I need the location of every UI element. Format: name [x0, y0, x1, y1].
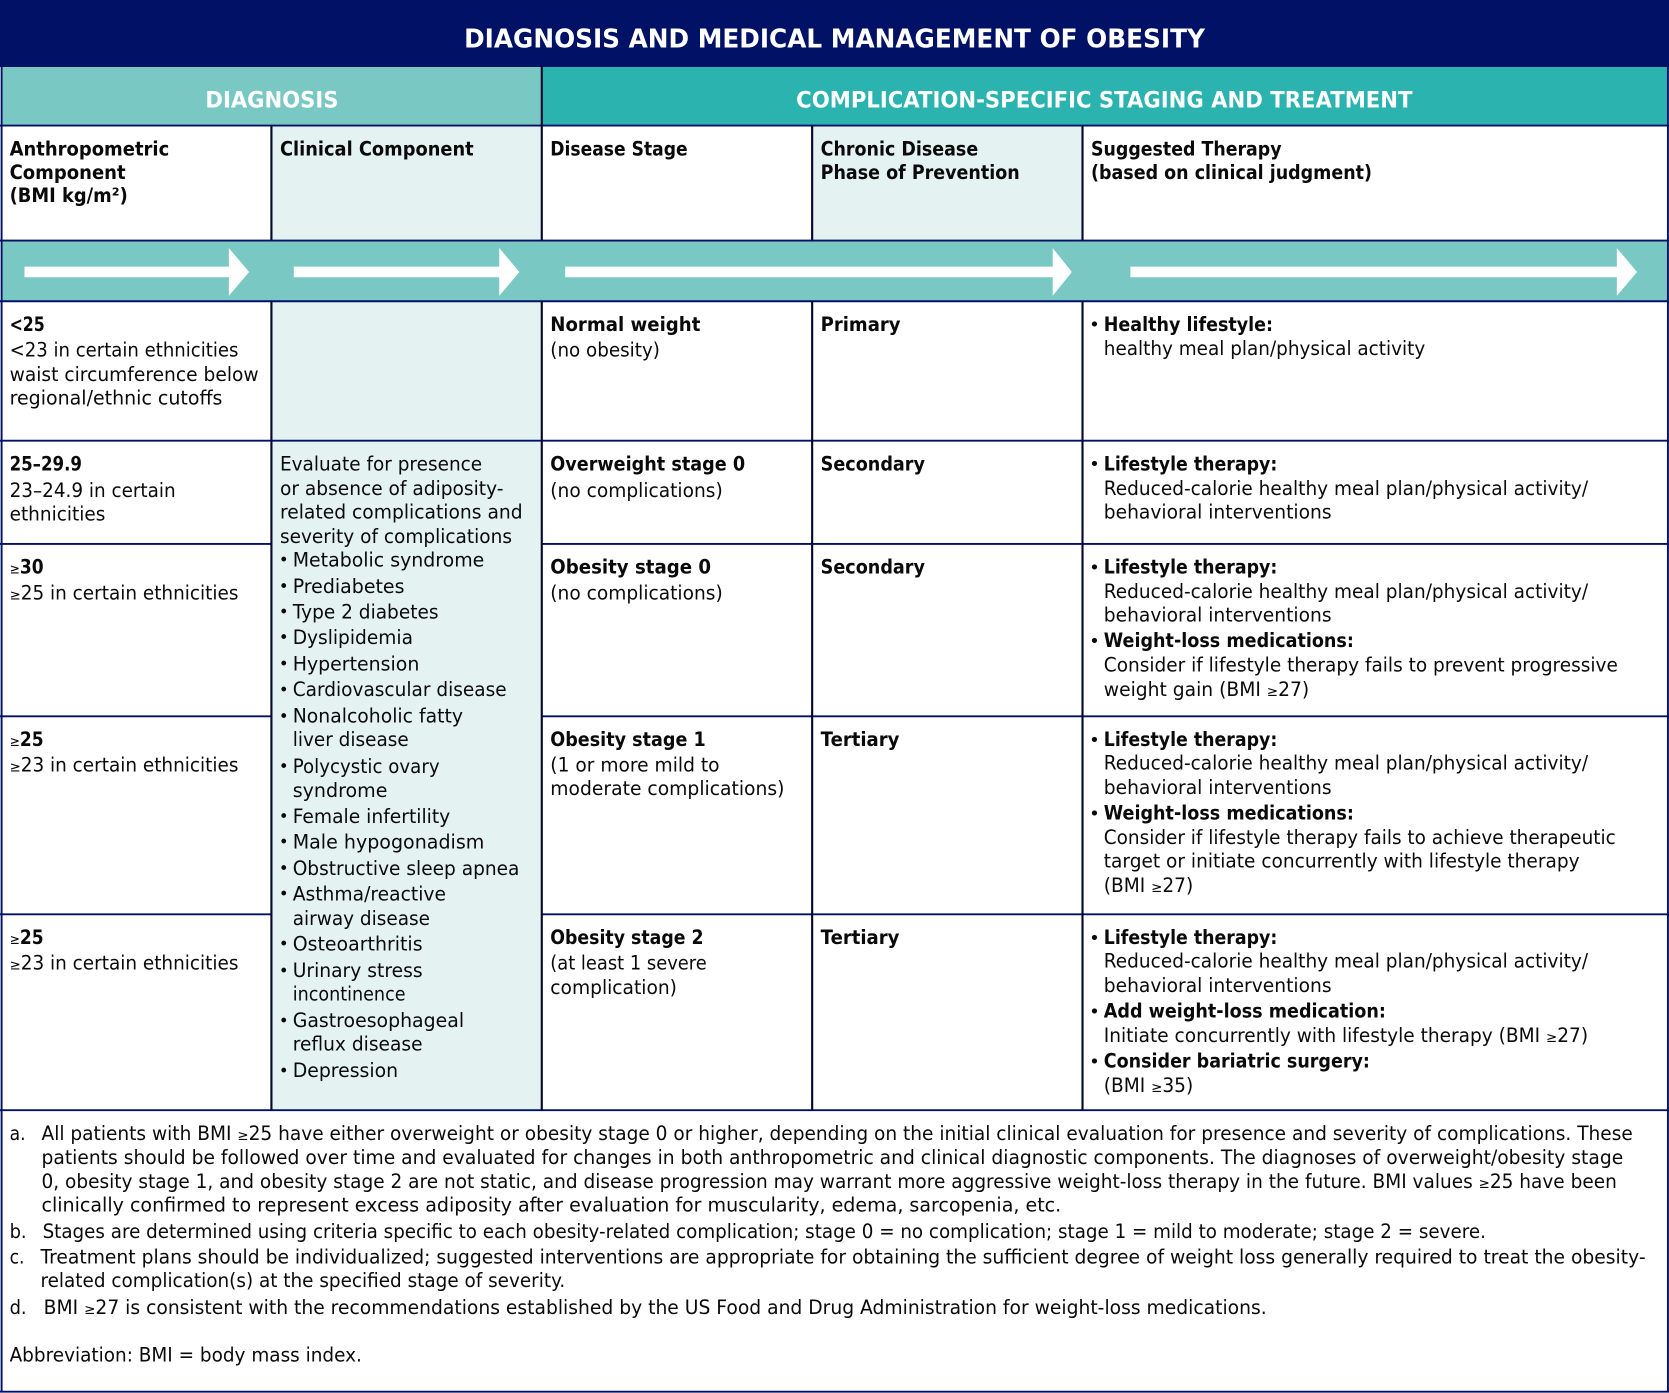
stage: overweight stage 0: (no complications) [550, 479, 723, 502]
therapy: obesity stage 1: target or initiate concurrently with lifestyle therapy [1104, 849, 1580, 872]
stage: obesity stage 0 [550, 556, 723, 604]
column header: chronic disease phase of prevention: Phase of Prevention [821, 161, 1020, 184]
complications list: • [279, 757, 289, 776]
evaluation intro text: related complications and [280, 500, 523, 523]
column shading: chronic disease phase [812, 126, 1083, 241]
complications list: • [279, 655, 289, 674]
complications list: • [279, 628, 289, 647]
complications list: Urinary stress [293, 959, 423, 982]
evaluation intro text [280, 452, 523, 548]
stage: obesity stage 1: Obesity stage 1 [550, 728, 706, 751]
footnote d: BMI ≥27 is consistent with the recommendations established by the US Food and Drug Administration for weight-loss medications. [44, 1296, 1267, 1319]
abbreviation note: Abbreviation: BMI = body mass index. [10, 1343, 362, 1366]
complications list: • [279, 680, 289, 699]
therapy: obesity stage 2: • [1089, 1001, 1100, 1022]
anthropometric: normal weight row: <23 in certain ethnicities [10, 339, 238, 362]
footnote a: patients should be followed over time and evaluated for changes in both anthropometric and clinical diagnostic components. The diagnoses of overweight/obesity stage [42, 1146, 1623, 1169]
section header: complication-specific staging and treatment [542, 66, 1668, 126]
complications list [279, 548, 519, 1082]
anthropometric: obesity stage 1 row: ≥25 [10, 728, 44, 751]
evaluation intro text: severity of complications [280, 525, 512, 548]
column header: chronic disease phase of prevention: Chronic Disease [821, 137, 978, 160]
complications list: syndrome [293, 779, 387, 802]
therapy: obesity stage 0: behavioral interventions [1104, 604, 1332, 627]
complications list: airway disease [293, 907, 430, 930]
complications list: Nonalcoholic fatty [293, 705, 463, 728]
footnote b: b. [10, 1220, 27, 1243]
anthropometric: overweight row [10, 452, 176, 525]
stage: obesity stage 1: (1 or more mild to [550, 754, 720, 777]
therapy: obesity stage 2: • [1089, 928, 1100, 949]
anthropometric: obesity stage 0 row [10, 556, 238, 604]
therapy: obesity stage 2 [1089, 926, 1589, 1097]
stage: overweight stage 0 [550, 452, 745, 502]
column header: suggested therapy: (based on clinical judgment) [1091, 161, 1372, 184]
therapy: obesity stage 1: Lifestyle therapy: [1104, 728, 1277, 751]
anthropometric: normal weight row: waist circumference below [10, 363, 259, 386]
therapy: overweight stage 0: • [1089, 454, 1100, 475]
therapy: obesity stage 2: • [1089, 1051, 1100, 1072]
anthropometric: normal weight row: <25 [10, 313, 45, 336]
stage: obesity stage 1: moderate complications) [550, 777, 784, 800]
complications list: • [279, 832, 289, 851]
anthropometric: obesity stage 2 row: ≥25 [10, 926, 44, 949]
therapy: overweight stage 0: behavioral interventions [1104, 500, 1332, 523]
footnote a: 0, obesity stage 1, and obesity stage 2 are not static, and disease progression may warrant more aggressive weight-loss therapy in the future. BMI values ≥25 have been [42, 1170, 1617, 1193]
complications list: Metabolic syndrome [293, 548, 484, 571]
therapy: obesity stage 0: weight gain (BMI ≥27) [1104, 678, 1309, 701]
complications list: • [279, 577, 289, 596]
column header: clinical component: Clinical Component [280, 137, 474, 160]
therapy: obesity stage 2: Initiate concurrently with lifestyle therapy (BMI ≥27) [1104, 1024, 1588, 1047]
complications list: Hypertension [293, 653, 419, 676]
complications list: reflux disease [293, 1033, 423, 1056]
evaluation intro text: or absence of adiposity- [280, 477, 503, 500]
anthropometric: overweight row: 23–24.9 in certain [10, 479, 176, 502]
therapy: obesity stage 2: Reduced-calorie healthy meal plan/physical activity/ [1104, 950, 1589, 973]
complications list: • [279, 859, 289, 878]
arrow: clinical [294, 248, 519, 296]
therapy: obesity stage 0 [1089, 556, 1618, 701]
prevention: secondary, overweight: Secondary [821, 452, 925, 475]
complications list: • [279, 707, 289, 726]
column header: suggested therapy [1091, 137, 1372, 184]
stage: obesity stage 2 [550, 926, 707, 999]
therapy: obesity stage 0: Consider if lifestyle therapy fails to prevent progressive [1104, 654, 1618, 677]
complications list: liver disease [293, 728, 409, 751]
complications list: Cardiovascular disease [293, 678, 507, 701]
complications list: Osteoarthritis [293, 933, 423, 956]
footnote a: All patients with BMI ≥25 have either overweight or obesity stage 0 or higher, depending on the initial clinical evaluation for presence and severity of complications. These [42, 1122, 1633, 1145]
therapy: overweight stage 0 [1089, 452, 1589, 523]
therapy: obesity stage 1: Reduced-calorie healthy meal plan/physical activity/ [1104, 752, 1589, 775]
footnote c: related complication(s) at the specified stage of severity. [40, 1269, 565, 1292]
therapy: obesity stage 1: Weight-loss medications: [1104, 802, 1354, 825]
therapy: healthy lifestyle [1089, 313, 1425, 360]
anthropometric: obesity stage 1 row: ≥23 in certain ethnicities [10, 754, 238, 777]
therapy: obesity stage 1 [1089, 728, 1616, 897]
anthropometric: overweight row: 25–29.9 [10, 452, 82, 475]
stage: normal weight: Normal weight [550, 313, 700, 336]
footnote a: clinically confirmed to represent excess adiposity after evaluation for muscularity, edema, sarcopenia, etc. [42, 1194, 1061, 1217]
complications list: • [279, 1061, 289, 1080]
footnote c [10, 1245, 1646, 1292]
complications list: Prediabetes [293, 575, 404, 598]
column shading: clinical component [271, 126, 542, 1110]
anthropometric: obesity stage 0 row: ≥30 [10, 556, 44, 579]
therapy: obesity stage 2: behavioral interventions [1104, 974, 1332, 997]
column header: disease stage: Disease Stage [550, 137, 688, 160]
section header: diagnosis [1, 66, 542, 126]
anthropometric: normal weight row [10, 313, 259, 409]
complications list: Gastroesophageal [293, 1009, 464, 1032]
complications list: • [279, 961, 289, 980]
footnote a [10, 1122, 1633, 1217]
therapy: obesity stage 0: Weight-loss medications: [1104, 629, 1354, 652]
stage: obesity stage 2: complication) [550, 976, 677, 999]
footnote a: a. [10, 1122, 26, 1145]
stage: obesity stage 2: Obesity stage 2 [550, 926, 704, 949]
column header: anthropometric component: Anthropometric [10, 137, 169, 160]
evaluation intro text: Evaluate for presence [280, 452, 482, 475]
section header: complication-specific staging and treatment: COMPLICATION-SPECIFIC STAGING AND TREATMENT [796, 89, 1413, 114]
stage: overweight stage 0: Overweight stage 0 [550, 452, 745, 475]
therapy: obesity stage 1: • [1089, 803, 1100, 824]
stage: obesity stage 2: (at least 1 severe [550, 952, 707, 975]
stage: obesity stage 0: (no complications) [550, 581, 723, 604]
therapy: obesity stage 0: • [1089, 631, 1100, 652]
complications list: Dyslipidemia [293, 626, 413, 649]
complications list: • [279, 1011, 289, 1030]
therapy: obesity stage 1: • [1089, 730, 1100, 751]
complications list: Depression [293, 1059, 398, 1082]
complications list: Polycystic ovary [293, 755, 440, 778]
footnotes panel [10, 1122, 1646, 1366]
therapy: obesity stage 2: Consider bariatric surgery: [1104, 1050, 1370, 1073]
complications list: Asthma/reactive [293, 882, 446, 905]
therapy: obesity stage 1: behavioral interventions [1104, 776, 1332, 799]
therapy: obesity stage 1: (BMI ≥27) [1104, 874, 1193, 897]
anthropometric: obesity stage 1 row [10, 728, 238, 777]
arrow: anthropometric [24, 248, 249, 296]
therapy: obesity stage 0: • [1089, 557, 1100, 578]
prevention: primary: Primary [821, 313, 901, 336]
complications list: • [279, 885, 289, 904]
stage: normal weight [550, 313, 700, 362]
column header: suggested therapy: Suggested Therapy [1091, 137, 1282, 160]
complications list: Type 2 diabetes [292, 600, 439, 623]
complications list: Female infertility [293, 805, 450, 828]
footnote c: Treatment plans should be individualized; suggested interventions are appropriate for obtaining the sufficient degree of weight loss generally required to treat the obesity- [39, 1245, 1646, 1268]
stage: obesity stage 0: Obesity stage 0 [550, 556, 711, 579]
footnote d: d. [10, 1296, 27, 1319]
clinical component: evaluation list [279, 452, 523, 1082]
therapy: overweight stage 0: Reduced-calorie healthy meal plan/physical activity/ [1104, 477, 1589, 500]
column header: anthropometric component: Component [10, 161, 126, 184]
therapy: healthy lifestyle: healthy meal plan/physical activity [1104, 337, 1425, 360]
prevention: tertiary, stage 2: Tertiary [821, 926, 900, 949]
therapy: obesity stage 0: Reduced-calorie healthy meal plan/physical activity/ [1104, 580, 1589, 603]
column header: chronic disease phase of prevention [821, 137, 1020, 184]
complications list: Obstructive sleep apnea [293, 857, 519, 880]
stage: normal weight: (no obesity) [550, 339, 660, 362]
footnote b: Stages are determined using criteria specific to each obesity-related complication; stage 0 = no complication; stage 1 = mild to moderate; stage 2 = severe. [43, 1220, 1486, 1243]
therapy: obesity stage 2: Lifestyle therapy: [1104, 926, 1277, 949]
complications list: • [279, 935, 289, 954]
anthropometric: overweight row: ethnicities [10, 502, 105, 525]
stage: obesity stage 1 [550, 728, 784, 800]
prevention: tertiary, stage 1: Tertiary [821, 728, 900, 751]
section header: diagnosis: DIAGNOSIS [205, 89, 338, 114]
therapy: obesity stage 2: Add weight-loss medication: [1104, 1000, 1386, 1023]
therapy: overweight stage 0: Lifestyle therapy: [1104, 452, 1277, 475]
prevention: secondary, obesity: Secondary [821, 556, 925, 579]
therapy: healthy lifestyle: Healthy lifestyle: [1104, 313, 1273, 336]
title banner [0, 0, 1669, 66]
arrow: stage and prevention [565, 248, 1072, 296]
complications list: incontinence [293, 983, 406, 1006]
therapy: obesity stage 2: (BMI ≥35) [1104, 1074, 1193, 1097]
therapy: healthy lifestyle: • [1089, 315, 1100, 336]
footnote c: c. [10, 1245, 24, 1268]
anthropometric: obesity stage 2 row: ≥23 in certain ethnicities [10, 952, 238, 975]
anthropometric: obesity stage 0 row: ≥25 in certain ethnicities [10, 581, 238, 604]
arrow: therapy [1130, 248, 1637, 296]
title banner: DIAGNOSIS AND MEDICAL MANAGEMENT OF OBESITY [464, 24, 1206, 54]
complications list: Male hypogonadism [293, 830, 484, 853]
therapy: obesity stage 0: Lifestyle therapy: [1104, 556, 1277, 579]
anthropometric: normal weight row: regional/ethnic cutoffs [10, 386, 222, 409]
column header: anthropometric component [10, 137, 169, 207]
arrow band [1, 241, 1668, 301]
therapy: obesity stage 1: Consider if lifestyle therapy fails to achieve therapeutic [1104, 826, 1616, 849]
complications list: • [279, 550, 289, 569]
complications list: • [279, 807, 289, 826]
column header: anthropometric component: (BMI kg/m²) [10, 184, 128, 207]
anthropometric: obesity stage 2 row [10, 926, 238, 975]
complications list: • [279, 603, 289, 622]
